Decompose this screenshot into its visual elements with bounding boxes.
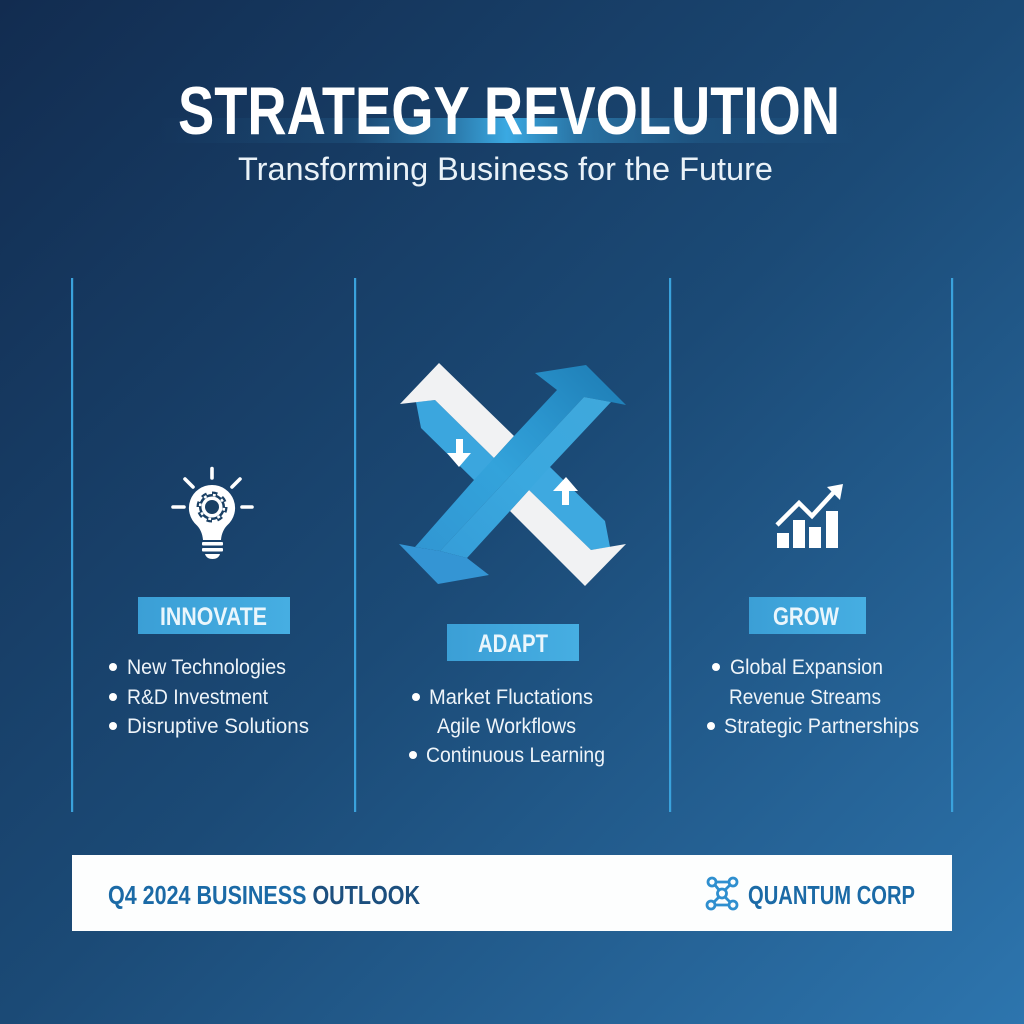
label: adapt: ADAPT	[478, 630, 548, 658]
title: STRATEGY REVOLUTION	[178, 73, 840, 149]
small down arrow	[447, 439, 471, 467]
title highlight bar	[157, 118, 857, 143]
bullet list: grow	[707, 656, 919, 738]
bullet list: grow: Global Expansion	[730, 656, 883, 679]
bullet list: innovate	[109, 656, 309, 738]
column dividers	[71, 278, 953, 812]
icon: crossing arrows	[399, 363, 626, 586]
label: innovate: INNOVATE	[160, 603, 267, 631]
footer headline: Q4 2024 BUSINESS OUTLOOK	[108, 880, 420, 910]
icon: lightbulb with gear	[173, 468, 252, 559]
bullet list: adapt: Continuous Learning	[426, 744, 605, 767]
label: innovate	[138, 597, 290, 634]
bullet list: grow: Revenue Streams	[729, 686, 881, 709]
label: adapt	[447, 624, 579, 661]
small up arrow	[553, 477, 578, 505]
bullet list: adapt	[409, 686, 605, 767]
icon: quantum corp logo	[707, 878, 737, 909]
panel: adapt	[399, 363, 626, 767]
bullet list: adapt: Agile Workflows	[437, 715, 576, 738]
label: grow: GROW	[773, 603, 839, 631]
icon: growth chart	[777, 484, 843, 548]
bullet list: innovate: Disruptive Solutions	[127, 715, 309, 738]
panel: innovate	[109, 468, 309, 738]
footer bar	[72, 855, 952, 931]
brand name: QUANTUM CORP	[748, 880, 915, 910]
label: grow	[749, 597, 866, 634]
bullet list: grow: Strategic Partnerships	[724, 715, 919, 738]
panel: grow	[707, 484, 919, 738]
bullet list: innovate: New Technologies	[127, 656, 286, 679]
bullet list: innovate: R&D Investment	[127, 686, 268, 709]
bullet list: adapt: Market Fluctations	[429, 686, 593, 709]
subtitle: Transforming Business for the Future	[238, 151, 773, 187]
